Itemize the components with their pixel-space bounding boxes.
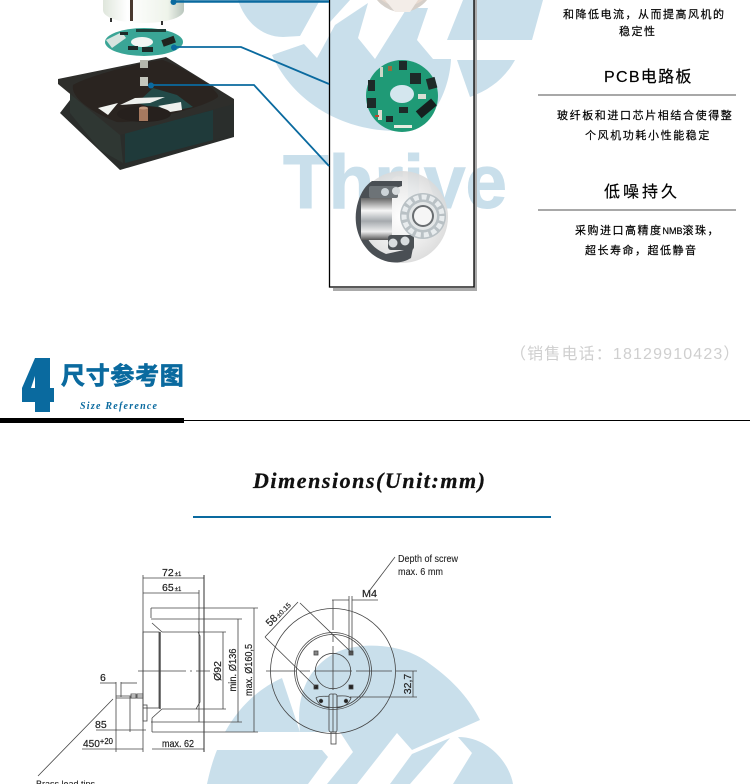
text block: stability: 稳定性 xyxy=(619,24,656,38)
callout lines xyxy=(148,0,329,166)
section subtitle: Size Reference xyxy=(80,401,158,412)
dimension labels: front view: M4 xyxy=(362,588,377,600)
dimension labels: side view: Ø92 xyxy=(212,661,224,681)
dimension labels: side view xyxy=(36,567,255,784)
watermark: Thrive wordmark: Thrive xyxy=(283,140,507,225)
watermark: bottom logo xyxy=(207,646,513,784)
image: bearings xyxy=(356,171,448,263)
fan frame xyxy=(58,57,234,170)
dimension labels: side view: 85 xyxy=(95,719,107,731)
section header: size reference xyxy=(0,358,750,423)
dimensions title: Dimensions(Unit:mm) xyxy=(252,468,485,493)
panel: component images box xyxy=(330,0,477,291)
text block: stability xyxy=(563,7,726,38)
number 4 xyxy=(22,358,54,412)
drawing: side view xyxy=(36,567,258,784)
dimension labels: side view: +20 xyxy=(100,737,114,746)
dimensions rule xyxy=(193,516,551,518)
text block: low noise: 采购进口高精度NMB滚珠， xyxy=(575,223,720,237)
dimension labels: side view: min. Ø136 xyxy=(227,648,239,692)
text block: stability: 和降低电流，从而提高风机的 xyxy=(563,7,726,21)
drawing: front view xyxy=(264,554,459,744)
circuit board disc xyxy=(105,28,183,56)
dimension labels: front view xyxy=(264,554,459,694)
divider: low noise xyxy=(538,209,736,211)
dimension labels: front view: 58±0.15 xyxy=(264,599,294,629)
image: PCB xyxy=(366,60,438,132)
dimension labels: side view: 65±1 xyxy=(162,582,182,594)
watermark: top logo xyxy=(238,0,543,225)
dimension labels: side view: 450 xyxy=(83,738,101,750)
motor cylinder xyxy=(103,0,184,25)
text block: PCB: 个风机功耗小性能稳定 xyxy=(585,128,711,142)
text block: low noise xyxy=(575,223,720,257)
phone number: （销售电话：18129910423） xyxy=(510,345,741,363)
text block: low noise: 超长寿命，超低静音 xyxy=(585,243,698,257)
section title: 尺寸参考图 xyxy=(61,362,184,390)
text block: PCB xyxy=(557,108,733,142)
exploded fan illustration xyxy=(58,0,234,170)
dimension labels: front view: max. 6 mm xyxy=(398,567,443,578)
dimension labels: side view: 72±1 xyxy=(162,567,182,579)
dimension labels: front view: Depth of screw xyxy=(398,554,459,565)
dimension labels: side view: max. 62 xyxy=(162,738,194,750)
dimension labels: front view: 32,7 xyxy=(402,674,414,694)
divider: PCB xyxy=(538,94,736,96)
heading: low noise: 低噪持久 xyxy=(604,183,680,201)
text block: PCB: 玻纤板和进口芯片相结合使得整 xyxy=(557,108,733,122)
heading: PCB board: PCB电路板 xyxy=(604,68,693,86)
dimension labels: side view: max. Ø160,5 xyxy=(243,644,255,696)
image: motor xyxy=(370,0,434,12)
dimension labels: side view: 6 xyxy=(100,672,106,684)
